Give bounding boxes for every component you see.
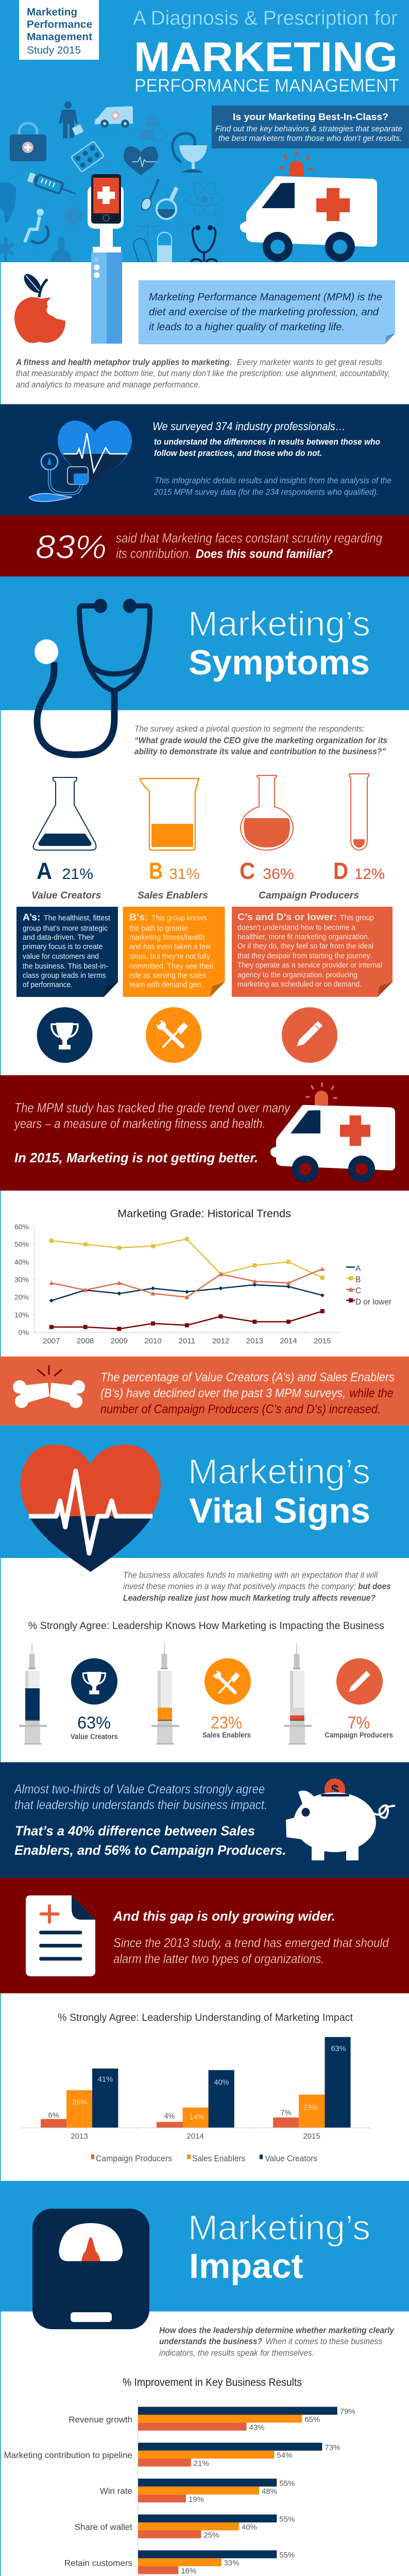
row: Revenue growth: Revenue growth bbox=[69, 2415, 132, 2425]
legend: B bbox=[355, 1276, 361, 1284]
text block: decline message bbox=[100, 1370, 395, 1416]
y axis labels: 40% bbox=[14, 1258, 29, 1266]
text block: fitness metaphor bbox=[15, 358, 390, 389]
panel: symptoms header bbox=[0, 577, 409, 710]
text block: grade trend: years – a measure of marketing fitness and health. bbox=[13, 1116, 266, 1131]
row: Retain customers: Retain customers bbox=[64, 2558, 132, 2568]
title: PERFORMANCE MANAGEMENT bbox=[134, 76, 399, 96]
text block: decline message: (B’s) have declined over the past 3 MPM surveys, bbox=[100, 1386, 346, 1400]
row: Retain customers: 33% bbox=[224, 2559, 240, 2568]
panel: 83 percent statistic: Does this sound familiar? bbox=[196, 547, 333, 561]
text block: gap message bbox=[113, 1908, 389, 1967]
panel: 83 percent statistic: its contribution. bbox=[116, 546, 192, 561]
grade labels: D bbox=[333, 858, 348, 884]
row: Share of wallet: Share of wallet bbox=[75, 2522, 132, 2532]
x axis labels: 2015 bbox=[303, 2132, 320, 2141]
panel: A's description bbox=[16, 907, 118, 997]
x axis labels: 2010 bbox=[144, 1336, 162, 1345]
panel: A's description: the business. This best-in- bbox=[23, 962, 108, 971]
heading: Marketing's Vital Signs: Vital Signs bbox=[189, 1492, 370, 1531]
callout: best-in-class banner: Find out the key behaviors & strategies that separate bbox=[215, 125, 402, 133]
text block: fitness metaphor: Every marketer wants to get great results bbox=[237, 358, 382, 367]
text block: funds to marketing: but does bbox=[358, 1582, 391, 1591]
icon: big ambulance bbox=[240, 151, 377, 262]
text block: survey description: to understand the differences in results between those who bbox=[154, 437, 380, 447]
panel: B's description bbox=[123, 907, 225, 997]
panel: B's description: and has even taken a few bbox=[129, 942, 211, 951]
row: Revenue growth: 65% bbox=[304, 2415, 320, 2424]
icon: pencil badge bbox=[282, 1007, 337, 1063]
icon: syringe Sales Enablers bbox=[151, 1643, 179, 1744]
icon: heart and blood pressure gauge bbox=[29, 420, 132, 502]
x axis labels: 2008 bbox=[77, 1336, 94, 1345]
legend: C bbox=[355, 1286, 361, 1295]
text block: leadership question: indicators, the results speak for themselves. bbox=[159, 2348, 314, 2358]
legend bbox=[346, 1264, 391, 1307]
icon: snake and bowl bbox=[173, 133, 207, 173]
icon: wheelchair bbox=[25, 209, 48, 243]
stat: 23% Sales Enablers bbox=[202, 1658, 251, 1740]
callout: MPM definition note: it leads to a higher quality of marketing life. bbox=[149, 321, 345, 333]
text block: pivotal survey question: The survey asked a pivotal question to segment the respondents: bbox=[134, 724, 365, 734]
text block: pivotal survey question: “What grade would the CEO give the marketing organization for its bbox=[134, 736, 387, 745]
text block: pivotal survey question: ability to demonstrate its value and contribution to the business?” bbox=[134, 747, 386, 756]
hero faint arcs bbox=[0, 129, 223, 355]
text block: leadership question: How does the leadership determine whether marketing clearly bbox=[159, 2326, 395, 2335]
text block: fitness metaphor: that measurably impact the bottom line, but many don’t like the prescription: use alignment, accountability, bbox=[16, 369, 390, 378]
icon: flask grade A bbox=[33, 777, 96, 850]
heading: Marketing's Symptoms bbox=[188, 604, 370, 682]
stat: 63% Value Creators bbox=[71, 1658, 118, 1741]
text block: decline message: while the bbox=[350, 1386, 394, 1400]
panel: C's and D's description: C’s and D’s or lower: bbox=[237, 912, 337, 922]
icon: heart with pulse bbox=[124, 146, 158, 175]
bar value labels: 23% bbox=[303, 2104, 318, 2112]
row: Marketing contribution to pipeline bbox=[4, 2443, 340, 2468]
text block: leadership question bbox=[159, 2326, 395, 2358]
text block: 40 percent difference: Enablers, and 56% to Campaign Producers. bbox=[14, 1842, 286, 1858]
bar value labels: 7% bbox=[281, 2109, 292, 2117]
bar value labels: 14% bbox=[189, 2113, 204, 2122]
text block: gap message: And this gap is only growing wider. bbox=[113, 1908, 335, 1924]
bar value labels: 4% bbox=[164, 2112, 175, 2121]
heading: Marketing's Impact bbox=[188, 2208, 370, 2286]
panel: C's and D's description: agency to the organization, producing bbox=[237, 971, 357, 979]
icon: capsules bbox=[132, 232, 172, 275]
row: Revenue growth bbox=[69, 2407, 355, 2432]
legend: Campaign Producers bbox=[96, 2154, 172, 2163]
study label box: Performance bbox=[27, 19, 92, 30]
heading: Marketing's Impact: Marketing’s bbox=[188, 2208, 370, 2247]
icon: star of life bbox=[0, 237, 15, 262]
callout: MPM definition note: diet and exercise of the marketing profession, and bbox=[149, 307, 379, 318]
panel: A's description: value for customers and bbox=[23, 952, 99, 961]
text block: leadership question: When it comes to these business bbox=[266, 2337, 382, 2346]
icon: tooth bbox=[0, 182, 16, 223]
x axis labels: 2014 bbox=[186, 2132, 204, 2141]
panel: impact header bbox=[0, 2181, 409, 2312]
icon: hand holding phone bbox=[88, 174, 124, 344]
text block: 40 percent difference: That’s a 40% difference between Sales bbox=[15, 1823, 255, 1838]
legend bbox=[91, 2154, 317, 2163]
row: Marketing contribution to pipeline: 73% bbox=[325, 2443, 340, 2452]
bar value labels: 26% bbox=[72, 2098, 88, 2107]
hero background panel bbox=[0, 0, 409, 262]
row: Share of wallet: 40% bbox=[242, 2523, 257, 2532]
panel: survey bbox=[0, 404, 409, 515]
text block: grade trend bbox=[13, 1100, 291, 1165]
icon: small ambulance bbox=[95, 106, 133, 128]
stat: 23% Sales Enablers: Sales Enablers bbox=[202, 1731, 251, 1740]
study label box bbox=[19, 0, 99, 60]
row: Share of wallet: 25% bbox=[203, 2531, 219, 2539]
icon: syringe Campaign Producers bbox=[284, 1643, 312, 1744]
legend: Value Creators bbox=[265, 2154, 317, 2163]
icon: piggy bank: $ bbox=[331, 1782, 339, 1798]
panel: gap growing wider bbox=[0, 1878, 409, 1993]
icon: large stethoscope bbox=[35, 599, 150, 755]
panel: B's description: B’s: bbox=[129, 912, 148, 922]
panel: C's and D's description: marketing as scheduled or on demand. bbox=[237, 980, 362, 989]
stat: 63% Value Creators: 63% bbox=[77, 1713, 111, 1732]
series A bbox=[52, 1285, 322, 1300]
grade labels: B bbox=[149, 858, 163, 884]
y axis labels: 20% bbox=[14, 1293, 29, 1301]
icon: apple bbox=[14, 271, 65, 343]
panel: A's description: class group leads in terms bbox=[23, 971, 106, 980]
heading: Marketing's Vital Signs: Marketing’s bbox=[188, 1452, 370, 1491]
row: Marketing contribution to pipeline: 21% bbox=[194, 2459, 209, 2468]
chart title: % Strongly Agree: Leadership Understanding of Marketing Impact bbox=[58, 2012, 353, 2024]
panel: A's description: of performance. bbox=[23, 980, 73, 989]
series B bbox=[52, 1239, 322, 1278]
bar value labels: 63% bbox=[331, 2045, 346, 2053]
bar value labels: 40% bbox=[214, 2078, 229, 2087]
text block: funds to marketing: Leadership realize just how much Marketing truly affects revenue? bbox=[123, 1594, 376, 1603]
callout: MPM definition note bbox=[139, 280, 395, 344]
grade labels: C bbox=[240, 858, 255, 884]
icon: beaker grade B bbox=[140, 778, 199, 850]
row: Revenue growth: 79% bbox=[340, 2408, 355, 2416]
panel: B's description: the path to greater bbox=[129, 924, 188, 933]
heading: Marketing's Impact: Impact bbox=[189, 2247, 303, 2286]
panel: vital signs header bbox=[0, 1426, 409, 1558]
chart title: % Improvement in Key Business Results bbox=[123, 2377, 302, 2388]
text block: survey description: follow best practices, and those who do not. bbox=[154, 449, 322, 458]
text block: 40 percent difference: Almost two-thirds of Value Creators strongly agree bbox=[13, 1782, 265, 1797]
panel: C's and D's description: This group bbox=[340, 913, 374, 922]
text block: decline message: number of Campaign Producers (C’s and D’s) increased. bbox=[100, 1402, 381, 1416]
icon: tools badge bbox=[146, 1007, 201, 1063]
icon: large heart with pulse bbox=[21, 1445, 161, 1572]
line chart: Marketing Grade Historical Trends bbox=[14, 1208, 391, 1345]
grade labels bbox=[37, 858, 385, 884]
icon: weight scale bbox=[32, 2209, 149, 2329]
x axis labels: 2009 bbox=[111, 1336, 128, 1345]
text block: funds to marketing bbox=[123, 1570, 391, 1603]
left edge stripe bbox=[0, 262, 1, 2576]
stat: 23% Sales Enablers: 23% bbox=[211, 1713, 242, 1732]
row: Marketing contribution to pipeline: 54% bbox=[277, 2451, 292, 2460]
legend: D or lower bbox=[355, 1298, 391, 1307]
icon: syringe bbox=[27, 172, 78, 199]
panel: B's description: committed. They see their bbox=[129, 962, 214, 971]
y axis labels: 30% bbox=[14, 1276, 29, 1284]
text block: grade trend: In 2015, Marketing is not getting better. bbox=[14, 1150, 258, 1165]
y axis labels: 60% bbox=[14, 1223, 29, 1231]
icon: round pill bbox=[64, 207, 82, 226]
text block: 40 percent difference bbox=[13, 1782, 286, 1858]
hero medical icon collage bbox=[0, 101, 223, 275]
title: A Diagnosis & Prescription for bbox=[133, 7, 398, 29]
panel: not getting better bbox=[0, 1075, 409, 1191]
heading: Marketing's Symptoms: Marketing’s bbox=[188, 604, 370, 643]
text block: grade trend: The MPM study has tracked the grade trend over many bbox=[14, 1100, 291, 1115]
icon: broken bone bbox=[13, 1366, 85, 1408]
bar value labels: 6% bbox=[48, 2112, 59, 2120]
legend: A bbox=[355, 1264, 361, 1273]
icon: syringe Value Creators bbox=[19, 1643, 47, 1744]
text block: leadership question: understands the business? bbox=[159, 2337, 262, 2346]
study label box: Study 2015 bbox=[27, 44, 81, 56]
icon: doctor bbox=[59, 101, 84, 138]
panel: two-thirds of Value Creators bbox=[0, 1762, 409, 1878]
text block: survey description bbox=[152, 420, 391, 497]
panel: A's description: and data-driven. Their bbox=[23, 933, 94, 942]
bar chart: leadership understanding of marketing impact bbox=[22, 2012, 370, 2163]
panel: C's and D's description bbox=[232, 907, 393, 997]
panel: B's description: This group knows bbox=[151, 914, 207, 922]
grade labels: 31% bbox=[169, 866, 200, 883]
row: Revenue growth: 43% bbox=[249, 2423, 265, 2432]
text block: funds to marketing: The business allocates funds to marketing with an expectation that it will bbox=[123, 1570, 378, 1580]
icon: round flask grade C bbox=[241, 775, 293, 850]
x axis labels: 2011 bbox=[179, 1336, 195, 1345]
grade labels: 21% bbox=[62, 866, 93, 883]
stat: 7% Campaign Producers: Campaign Producers bbox=[325, 1731, 393, 1740]
panel: B's description: team with demand gen. bbox=[129, 980, 203, 989]
icon: medical document bbox=[26, 1895, 95, 1976]
y axis labels: 10% bbox=[14, 1311, 29, 1319]
row: Share of wallet: 55% bbox=[279, 2515, 295, 2524]
icon: small stethoscope bbox=[191, 226, 217, 262]
panel: B's description: marketing fitness/health bbox=[129, 933, 205, 942]
x axis labels: 2007 bbox=[43, 1336, 60, 1345]
panel: C's and D's description: that they despair from starting the journey. bbox=[237, 952, 372, 960]
panel: declining percentages bbox=[0, 1357, 409, 1426]
panel: C's and D's description: Or if they do, they feel so far from the ideal bbox=[237, 942, 373, 951]
panel: 83 percent statistic bbox=[0, 515, 409, 577]
text block: gap message: alarm the latter two types of organizations. bbox=[113, 1952, 325, 1967]
icon: ambulance on red bbox=[270, 1083, 395, 1182]
heading: Marketing's Vital Signs bbox=[188, 1452, 370, 1531]
row: Win rate: 19% bbox=[189, 2495, 204, 2504]
row: Win rate bbox=[100, 2479, 295, 2504]
heading: Marketing's Symptoms: Symptoms bbox=[189, 643, 370, 682]
stat: 7% Campaign Producers: 7% bbox=[348, 1713, 370, 1732]
text block: pivotal survey question bbox=[134, 724, 387, 756]
icon: burger and capsule bbox=[140, 116, 167, 140]
study label box: Management bbox=[27, 31, 92, 43]
panel: A's description: primary focus is to create bbox=[23, 942, 103, 951]
callout: best-in-class banner: Is your Marketing Best-In-Class? bbox=[233, 112, 388, 122]
segment names: Value Creators bbox=[31, 890, 101, 901]
icon: medical bag bbox=[10, 123, 46, 161]
icon: bottle bbox=[51, 238, 72, 262]
panel: A's description: group that’s more strategic bbox=[23, 924, 108, 933]
2014 bars bbox=[157, 2070, 234, 2128]
row: Win rate: 48% bbox=[262, 2487, 277, 2496]
icon: atom bbox=[186, 180, 223, 218]
icon: lab flask and spoon bbox=[140, 179, 177, 219]
x axis labels: 2013 bbox=[246, 1336, 263, 1345]
panel: 83 percent statistic: 83% bbox=[36, 529, 107, 566]
text block: survey description: 2015 MPM survey data (for the 234 respondents who qualified). bbox=[154, 487, 379, 497]
bar value labels bbox=[48, 2045, 346, 2122]
text block: funds to marketing: invest these monies in a way that positively impacts the company; bbox=[123, 1582, 356, 1591]
series D bbox=[52, 1311, 322, 1329]
icon: trophy badge bbox=[37, 1007, 93, 1063]
segment names bbox=[31, 890, 359, 901]
panel: A's description: The healthiest, fittest bbox=[44, 914, 111, 922]
row: Retain customers bbox=[64, 2550, 295, 2575]
x axis labels: 2014 bbox=[280, 1336, 297, 1345]
grade labels: A bbox=[37, 858, 52, 884]
icon: caduceus bbox=[136, 223, 161, 242]
row: Win rate: 55% bbox=[279, 2479, 295, 2488]
text block: survey description: This infographic details results and insights from the analysis of the bbox=[155, 476, 391, 485]
x axis labels bbox=[71, 2132, 320, 2141]
2015 bars bbox=[273, 2037, 351, 2128]
icon: test tube grade D bbox=[349, 774, 369, 850]
panel: C's and D's description: doesn’t understand how to become a bbox=[237, 923, 356, 932]
row: Win rate: Win rate bbox=[100, 2486, 132, 2496]
segment names: Campaign Producers bbox=[259, 890, 359, 901]
text block: 40 percent difference: that leadership understands their business impact. bbox=[14, 1798, 267, 1812]
segment names: Sales Enablers bbox=[138, 890, 208, 901]
panel: B's description: steps, but they’re not fully bbox=[129, 952, 210, 961]
title bbox=[133, 7, 399, 96]
grade labels: 36% bbox=[263, 866, 294, 883]
row: Marketing contribution to pipeline: Marketing contribution to pipeline bbox=[4, 2450, 132, 2460]
icon: piggy bank bbox=[286, 1778, 395, 1860]
panel: C's and D's description: healthier, more fit marketing organization. bbox=[237, 933, 370, 941]
panel: A's description: A’s: bbox=[23, 912, 40, 922]
row: Retain customers: 55% bbox=[279, 2551, 295, 2560]
2013 bars bbox=[41, 2069, 118, 2128]
callout: MPM definition note: Marketing Performance Management (MPM) is the bbox=[149, 292, 382, 303]
y axis labels: 0% bbox=[19, 1328, 29, 1336]
stat: 63% Value Creators: Value Creators bbox=[71, 1733, 118, 1741]
icon: blister pills bbox=[71, 141, 104, 172]
panel: B's description: role as serving the sales bbox=[129, 971, 206, 980]
x axis labels: 2012 bbox=[212, 1336, 229, 1345]
text block: survey description: We surveyed 374 industry professionals… bbox=[152, 420, 346, 433]
title: MARKETING bbox=[134, 34, 398, 80]
x axis labels: 2015 bbox=[314, 1336, 331, 1345]
study label box: Marketing bbox=[27, 6, 77, 18]
bar value labels: 41% bbox=[98, 2075, 113, 2083]
stat: 7% Campaign Producers bbox=[325, 1658, 393, 1740]
y axis labels bbox=[14, 1223, 29, 1336]
row: Share of wallet bbox=[75, 2515, 295, 2539]
callout: best-in-class banner bbox=[212, 106, 409, 148]
panel: C's and D's description: They operate as a service provider or internal bbox=[237, 961, 382, 970]
row: Retain customers: 16% bbox=[181, 2567, 196, 2575]
text block: fitness metaphor: A fitness and health metaphor truly applies to marketing. bbox=[15, 358, 232, 367]
chart title: Marketing Grade: Historical Trends bbox=[117, 1208, 291, 1220]
legend: Sales Enablers bbox=[192, 2154, 245, 2163]
grade labels: 12% bbox=[354, 866, 385, 883]
bar chart: improvement in key business results bbox=[4, 2377, 400, 2576]
text block: fitness metaphor: and analytics to measure and manage performance. bbox=[16, 380, 200, 389]
heading: leadership knows chart: % Strongly Agree: Leadership Knows How Marketing is Impacting the Business bbox=[28, 1620, 384, 1632]
x axis labels bbox=[43, 1336, 331, 1345]
x axis labels: 2013 bbox=[71, 2132, 88, 2141]
series C bbox=[52, 1269, 322, 1297]
callout: best-in-class banner: the best marketers from those who don’t get results. bbox=[218, 134, 402, 143]
y axis labels: 50% bbox=[14, 1240, 29, 1248]
